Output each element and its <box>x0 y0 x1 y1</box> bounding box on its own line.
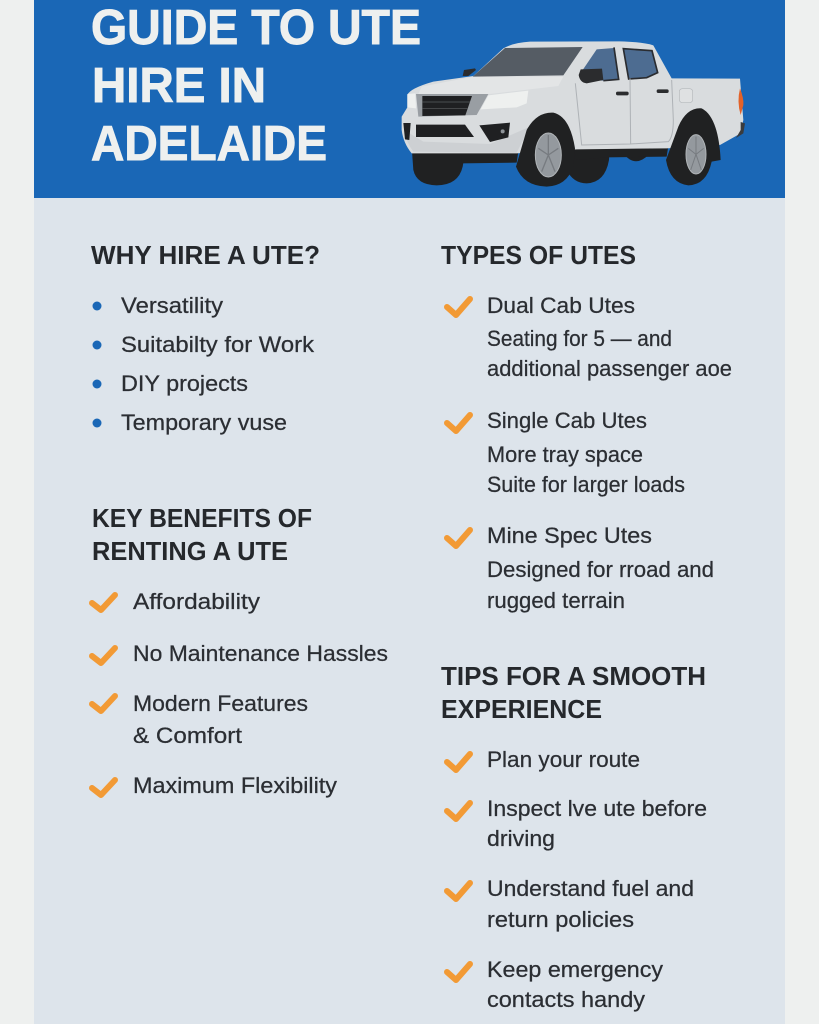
side windows <box>583 48 619 81</box>
checklist: dual cab: Dual Cab Utes <box>487 293 635 318</box>
checklist: mine spec: Designed for rroad and <box>487 557 714 582</box>
bullet list <box>92 293 315 435</box>
panel: content background <box>34 198 785 1024</box>
heading: key benefits: RENTING A UTE <box>92 536 288 566</box>
grille <box>416 94 488 117</box>
title: HIRE IN <box>92 59 266 113</box>
checklist: benefits: Modern Features <box>133 691 308 716</box>
checklist: tips: Plan your route <box>487 747 640 772</box>
rear wheel <box>666 108 721 185</box>
checklist: benefits <box>92 589 388 798</box>
checklist: tips: Keep emergency <box>487 957 663 982</box>
panel: why hire a ute <box>91 240 320 435</box>
title: GUIDE TO UTE <box>91 1 421 55</box>
heading: tips: EXPERIENCE <box>441 694 602 724</box>
checklist: benefits: No Maintenance Hassles <box>133 641 388 666</box>
checklist: mine spec <box>447 523 714 613</box>
title: ADELAIDE <box>91 117 327 171</box>
heading: types of utes: TYPES OF UTES <box>441 240 636 270</box>
front wheel <box>516 113 575 187</box>
checklist: single cab <box>447 408 685 497</box>
headlights <box>481 91 528 109</box>
checklist: tips: Understand fuel and <box>487 876 694 901</box>
checklist: tips: contacts handy <box>487 987 645 1012</box>
tail lamp and rear bumper <box>738 88 743 115</box>
checklist: benefits: Maximum Flexibility <box>133 773 337 798</box>
heading: key benefits <box>92 503 312 566</box>
bullet list: Suitabilty for Work <box>121 332 315 357</box>
checklist: dual cab: additional passenger aoe <box>487 356 732 381</box>
checklist: tips: return policies <box>487 907 634 932</box>
heading: tips <box>441 661 706 724</box>
checklist: single cab: More tray space <box>487 442 643 467</box>
checklist: tips: Inspect lve ute before <box>487 796 707 821</box>
checklist: single cab: Suite for larger loads <box>487 472 685 497</box>
bullet list: Temporary vuse <box>121 410 287 435</box>
checklist: benefits: Affordability <box>133 589 260 614</box>
panel: tips <box>441 661 707 1012</box>
door seams and handles <box>575 78 673 145</box>
mirrors <box>463 68 476 76</box>
bumper openings <box>416 125 474 137</box>
heading: tips: TIPS FOR A SMOOTH <box>441 661 706 691</box>
panel: header banner <box>34 0 785 198</box>
windshield <box>473 47 583 77</box>
checklist: benefits: & Comfort <box>133 723 242 748</box>
title <box>91 1 421 171</box>
panel: types of utes <box>441 240 732 613</box>
checklist: dual cab <box>447 293 732 381</box>
checklist: mine spec: rugged terrain <box>487 588 625 613</box>
checklist: tips: driving <box>487 826 555 851</box>
bullet list: DIY projects <box>121 371 248 396</box>
checklist: mine spec: Mine Spec Utes <box>487 523 652 548</box>
checklist: dual cab: Seating for 5 — and <box>487 326 672 351</box>
bullet list: Versatility <box>121 293 223 318</box>
icon: white ute truck <box>402 41 745 187</box>
heading: why hire a ute: WHY HIRE A UTE? <box>91 240 320 270</box>
heading: key benefits: KEY BENEFITS OF <box>92 503 312 533</box>
panel: key benefits <box>92 503 388 798</box>
checklist: tips <box>447 747 707 1012</box>
checklist: single cab: Single Cab Utes <box>487 408 647 433</box>
